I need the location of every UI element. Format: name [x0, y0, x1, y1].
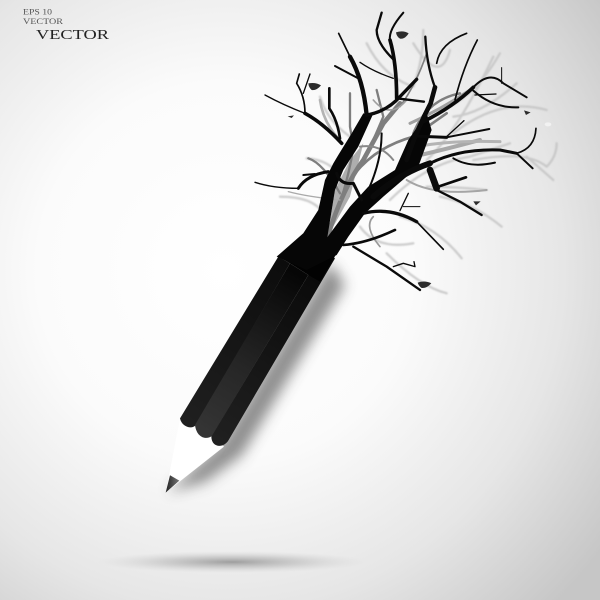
trunk [277, 113, 432, 270]
tree shadow branches [280, 30, 557, 293]
right upper branch [423, 87, 473, 122]
pale leaf [545, 122, 551, 126]
tree leaves [288, 31, 531, 288]
heading: vector label [23, 8, 110, 43]
top branch [390, 40, 397, 98]
pencil lead [166, 475, 179, 493]
left main branch [367, 79, 417, 115]
heading: vector label: VECTOR [23, 17, 64, 26]
tree trunk wedge fill [327, 143, 363, 237]
left branch [298, 172, 328, 188]
ground shadow [97, 551, 367, 573]
heading: vector label: EPS 10 [23, 8, 52, 16]
pencil [166, 240, 337, 493]
tree [255, 13, 557, 293]
lower right branch [430, 170, 437, 188]
bottom branches [343, 230, 395, 245]
inner small branches [337, 173, 362, 200]
right long branch [373, 163, 430, 197]
tree grey inner branches [288, 53, 500, 247]
right middle branch [413, 136, 447, 137]
lower branch [363, 211, 417, 222]
upper left branch [305, 113, 342, 143]
tree black branches [255, 13, 536, 290]
pencil barrel bands [180, 257, 290, 427]
pencil cast shadow [168, 262, 345, 492]
centre branch [407, 87, 435, 160]
heading: vector label: VECTOR [36, 28, 110, 43]
pencil wood tip [166, 418, 224, 493]
